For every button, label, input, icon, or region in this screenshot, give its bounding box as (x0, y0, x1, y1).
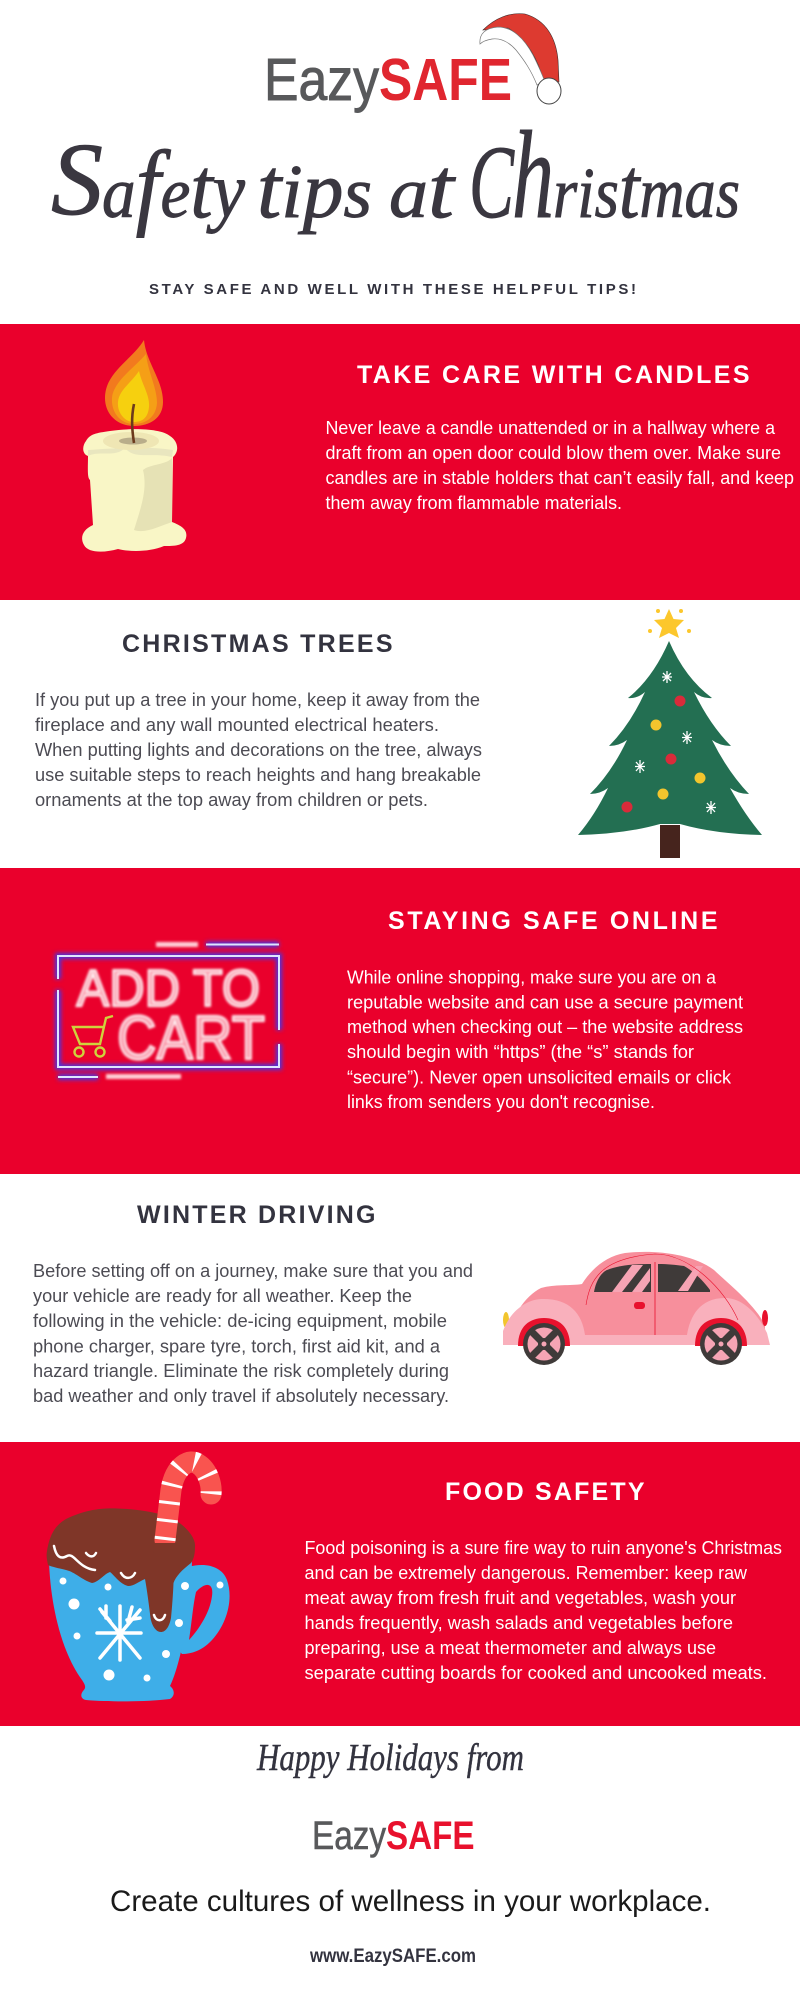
title: at (389, 140, 456, 236)
text block: links from senders you don't recognise. (347, 1092, 655, 1112)
text block (33, 1261, 473, 1406)
text block (326, 418, 794, 513)
text block: When putting lights and decorations on the tree, always (35, 740, 482, 760)
title: ristmas (553, 140, 740, 236)
text block: Food poisoning is a sure fire way to ruin anyone's Christmas (304, 1538, 782, 1558)
icon: hot chocolate mug (47, 1462, 230, 1701)
heading: TAKE CARE WITH CANDLES (357, 361, 753, 389)
icon: neon add to cart sign: CART (117, 1004, 265, 1073)
icon: candle (82, 340, 186, 552)
text block: your vehicle are ready for all weather. Keep the (33, 1286, 412, 1306)
panel: candles (0, 324, 800, 600)
text block: method when checking out – the website address (347, 1017, 743, 1037)
text block: meat away from fresh fruit and vegetables, wash your (304, 1588, 736, 1608)
icon: christmas tree (578, 609, 762, 858)
text block: should begin with “https” (the “s” stands for (347, 1042, 694, 1062)
footer greeting: Happy Holidays from (256, 1737, 524, 1779)
footer logo: Eazy (312, 1814, 386, 1858)
icon: neon add to cart sign (58, 944, 279, 1077)
text block: use suitable steps to reach heights and hang breakable (35, 765, 481, 785)
text block (347, 968, 743, 1112)
website: www.EazySAFE.com (309, 1946, 476, 1967)
text block: following in the vehicle: de-icing equipment, mobile (33, 1311, 447, 1331)
logo: EazySAFE with Santa hat: Eazy (264, 47, 379, 113)
logo: EazySAFE with Santa hat (264, 14, 561, 113)
icon: star (654, 609, 684, 638)
title: h (512, 107, 554, 245)
text block: hazard triangle. Eliminate the risk completely during (33, 1361, 449, 1381)
text block: ornaments at the top away from children or pets. (35, 790, 428, 810)
text block: hands frequently, wash salads and vegetables before (304, 1613, 733, 1633)
subtitle: STAY SAFE AND WELL WITH THESE HELPFUL TIPS! (149, 281, 639, 298)
icon: Santa hat (480, 14, 561, 104)
title: afety (102, 131, 245, 238)
text block: Before setting off on a journey, make sure that you and (33, 1261, 473, 1281)
footer logo (312, 1814, 474, 1858)
text block (35, 690, 482, 810)
text block: “secure”). Never open unsolicited emails or click (347, 1068, 732, 1088)
text block: preparing, use a meat thermometer and always use (304, 1638, 716, 1658)
tagline: Create cultures of wellness in your workplace. (110, 1885, 711, 1918)
heading: WINTER DRIVING (137, 1201, 379, 1229)
panel: christmas trees (0, 600, 800, 868)
title: C (469, 125, 515, 240)
icon: neon add to cart sign: ADD TO (76, 960, 260, 1018)
text block: Never leave a candle unattended or in a hallway where a (326, 418, 776, 438)
text block: If you put up a tree in your home, keep it away from the (35, 690, 480, 710)
text block: While online shopping, make sure you are on a (347, 968, 717, 988)
title (51, 107, 740, 245)
panel: staying safe online (0, 868, 800, 1174)
text block: phone charger, spare tyre, torch, first aid kit, and a (33, 1336, 441, 1356)
heading: FOOD SAFETY (445, 1478, 648, 1506)
footer logo: SAFE (386, 1814, 474, 1858)
text block: bad weather and only travel if absolutely necessary. (33, 1386, 449, 1406)
text block: candles are in stable holders that can’t easily fall, and keep (326, 468, 794, 488)
title: S (51, 122, 103, 237)
text block: them away from flammable materials. (326, 493, 622, 513)
panel: winter driving (0, 1174, 800, 1442)
logo: EazySAFE with Santa hat: SAFE (379, 47, 512, 113)
text block: separate cutting boards for cooked and uncooked meats. (304, 1663, 767, 1683)
panel: food safety (0, 1442, 800, 1726)
text block: and can be extremely dangerous. Remember: keep raw (304, 1563, 748, 1583)
text block (304, 1538, 782, 1683)
heading: CHRISTMAS TREES (122, 630, 396, 658)
title: tips (257, 140, 372, 236)
icon: pink car (503, 1252, 770, 1365)
text block: reputable website and can use a secure payment (347, 992, 743, 1012)
text block: fireplace and any wall mounted electrical heaters. (35, 715, 439, 735)
heading: STAYING SAFE ONLINE (388, 907, 721, 935)
text block: draft from an open door could blow them over. Make sure (326, 443, 781, 463)
